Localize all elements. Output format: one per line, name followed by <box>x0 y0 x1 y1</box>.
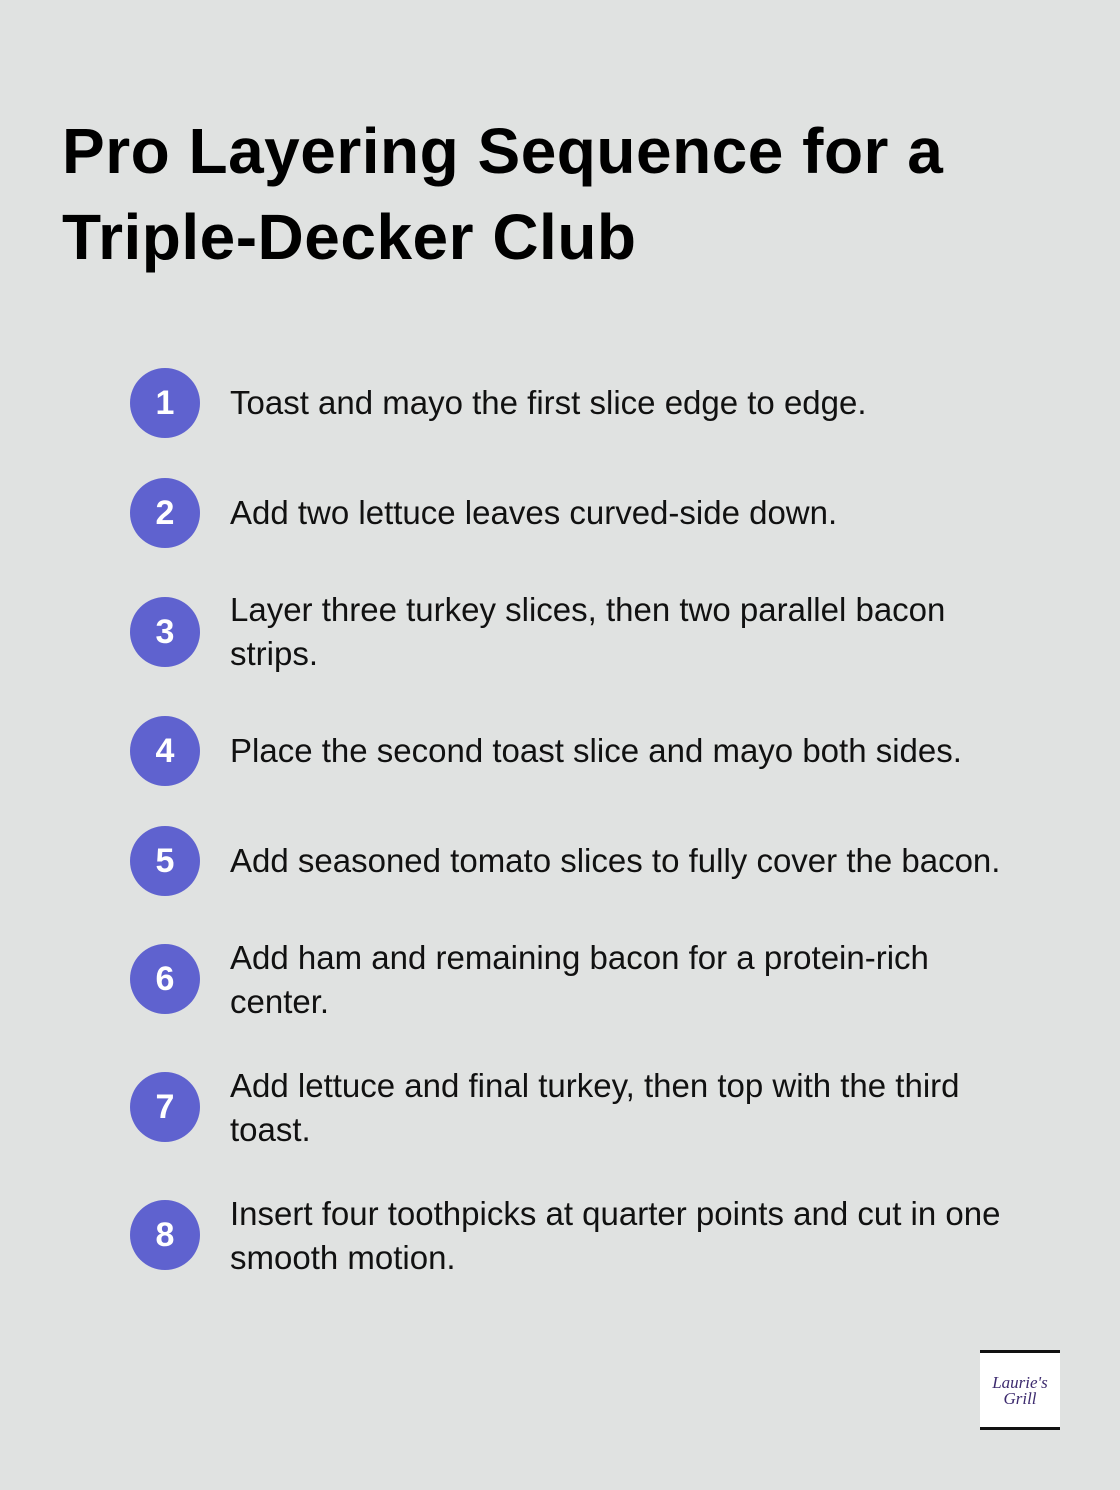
step 7: Add lettuce and final turkey, then top with the third <box>230 1067 960 1104</box>
step 1: 1 <box>156 384 174 422</box>
step 5: 5 <box>156 842 174 880</box>
step 4: Place the second toast slice and mayo both sides. <box>230 732 962 769</box>
step 6: Add ham and remaining bacon for a protein-rich <box>230 939 929 976</box>
step 4: 4 <box>156 732 174 770</box>
logo: Laurie's <box>992 1373 1048 1392</box>
logo: Grill <box>1003 1389 1037 1408</box>
step 5 <box>130 826 1000 896</box>
step 2 <box>130 478 837 548</box>
step 7: 7 <box>156 1088 174 1126</box>
step 4 <box>130 716 962 786</box>
step 8: 8 <box>156 1216 174 1254</box>
step 3 <box>130 591 945 672</box>
step 7: toast. <box>230 1111 311 1148</box>
step 7 <box>130 1067 960 1148</box>
step 2: 2 <box>156 494 174 532</box>
step 1: Toast and mayo the first slice edge to edge. <box>230 384 867 421</box>
step 6: center. <box>230 983 329 1020</box>
title <box>62 115 944 273</box>
step 3: Layer three turkey slices, then two parallel bacon <box>230 591 945 628</box>
step 6 <box>130 939 929 1020</box>
title: Triple-Decker Club <box>62 201 636 273</box>
step 1 <box>130 368 867 438</box>
step 8: Insert four toothpicks at quarter points and cut in one <box>230 1195 1000 1232</box>
logo <box>980 1350 1060 1430</box>
step 8: smooth motion. <box>230 1239 456 1276</box>
step 3: 3 <box>156 613 174 651</box>
title: Pro Layering Sequence for a <box>62 115 943 187</box>
step 5: Add seasoned tomato slices to fully cover the bacon. <box>230 842 1000 879</box>
step 6: 6 <box>156 960 174 998</box>
step 8 <box>130 1195 1000 1276</box>
step 3: strips. <box>230 635 318 672</box>
step 2: Add two lettuce leaves curved-side down. <box>230 494 837 531</box>
